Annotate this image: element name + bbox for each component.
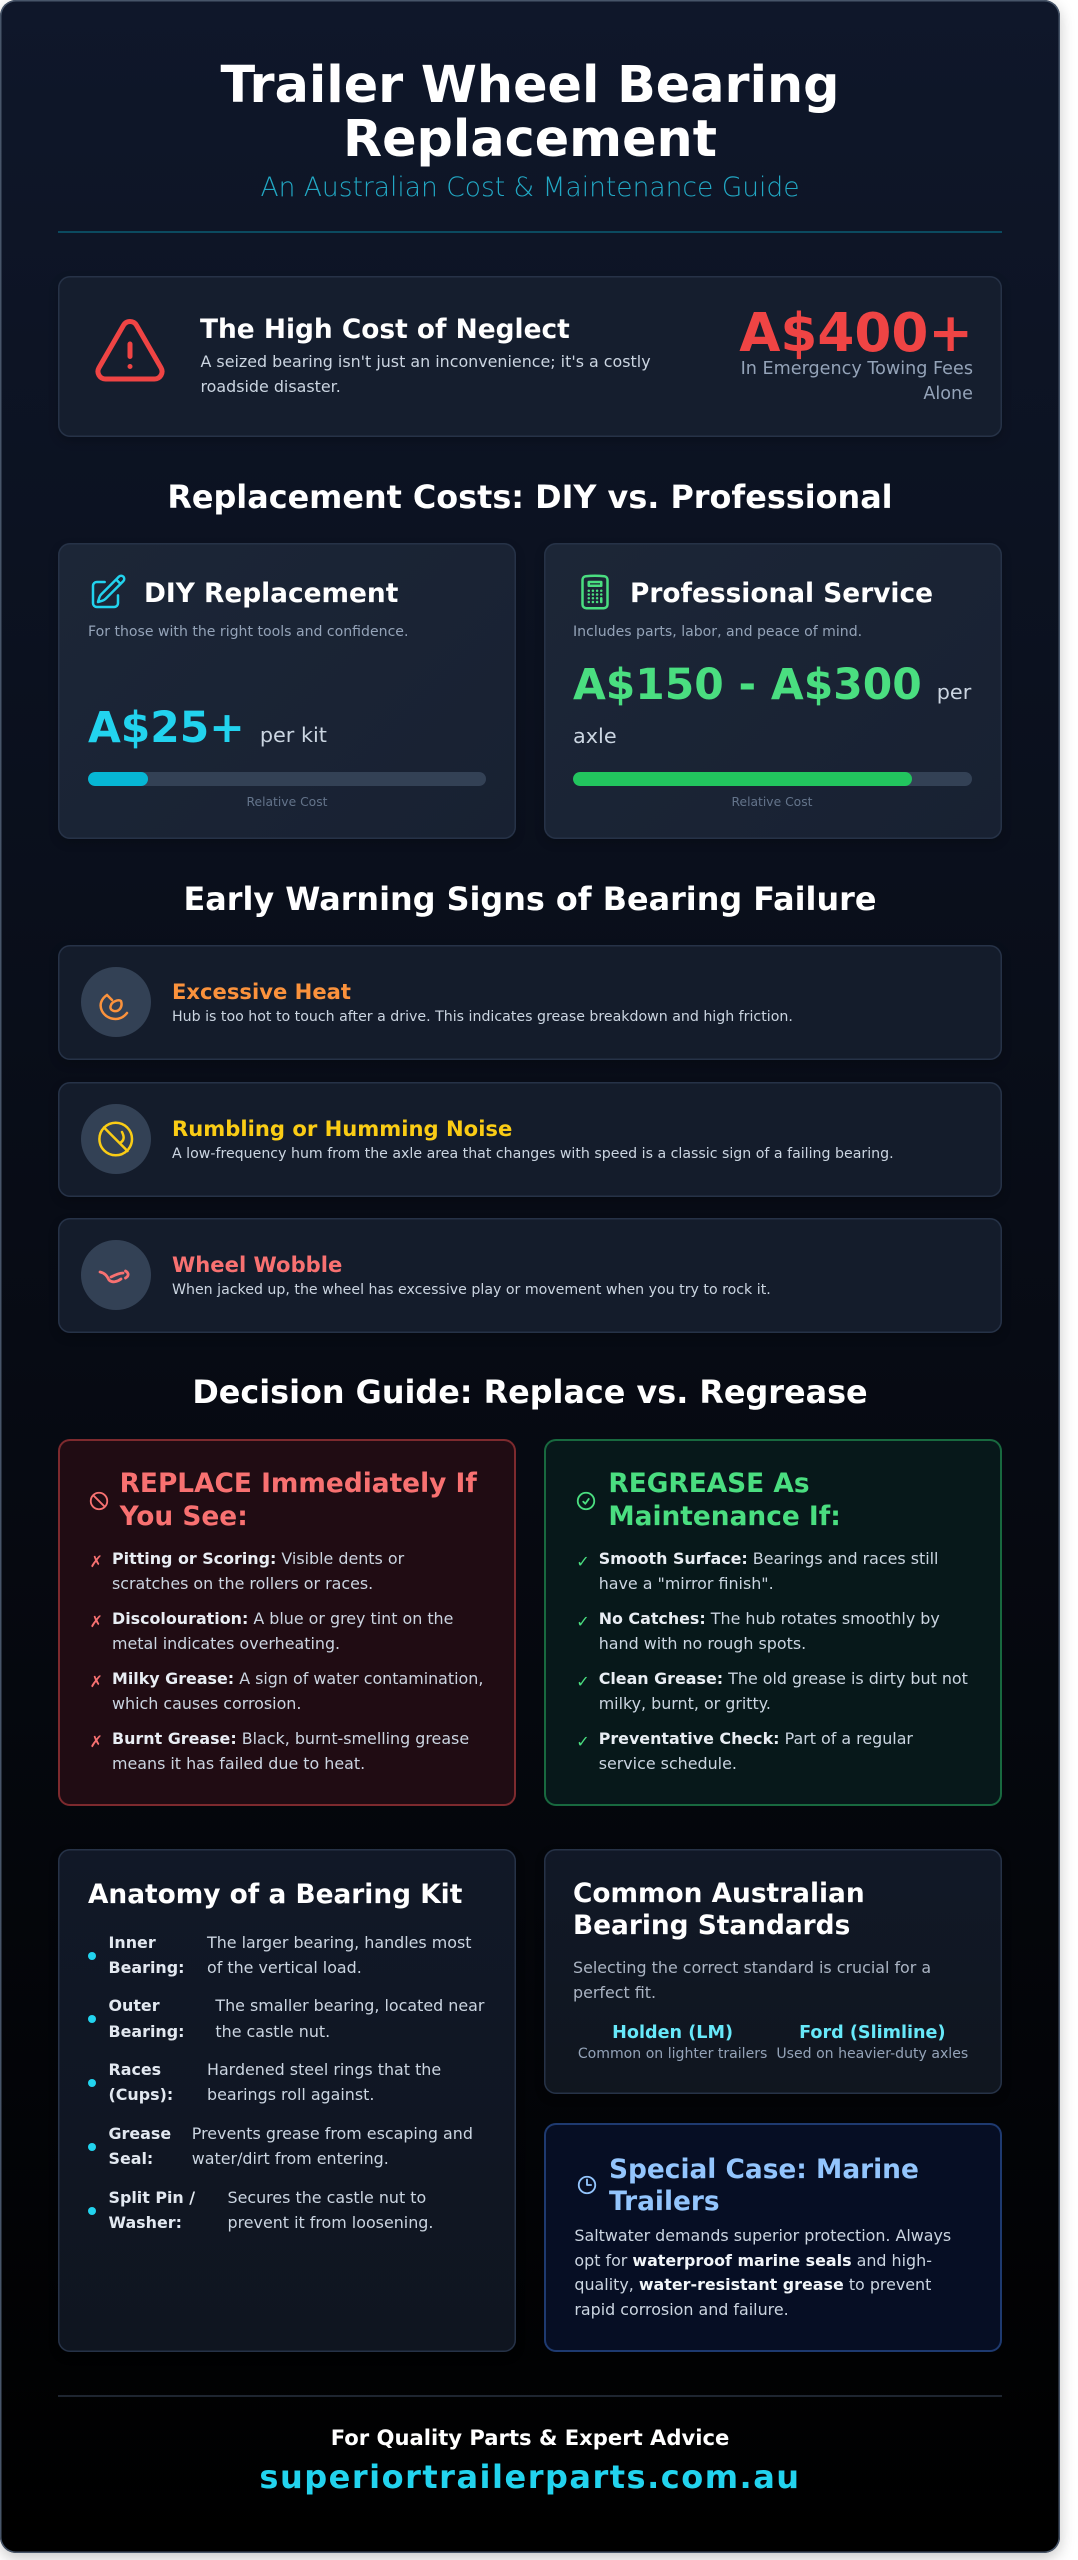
text: marine advice <box>574 2226 951 2318</box>
item: inner bearing: Inner <box>108 1933 156 1952</box>
heading: decision guide: Decision Guide: Replace vs. Regrease <box>192 1373 868 1411</box>
panel: replace: ✗ <box>90 1552 103 1571</box>
item: races: bearings roll against. <box>207 2085 374 2104</box>
panel: regrease: ✓ <box>576 1732 590 1750</box>
panel: rumbling noise <box>58 1082 1002 1197</box>
heading: DIY: DIY Replacement <box>144 578 398 609</box>
icon: no symbol <box>90 1492 108 1510</box>
standard: Ford: Ford (Slimline) <box>799 2022 946 2042</box>
item: pitting <box>90 1549 404 1593</box>
item: races <box>88 2060 441 2104</box>
item: burnt grease <box>90 1728 469 1772</box>
item: outer bearing <box>88 1996 484 2041</box>
item: inner bearing: of the vertical load. <box>207 1958 362 1977</box>
item: preventative check: service schedule. <box>599 1754 737 1772</box>
description: rumbling noise: A low-frequency hum from the axle area that changes with speed is a classic sign of a failing bearing. <box>172 1146 894 1162</box>
heading: standards <box>573 1878 865 1941</box>
icon: check circle <box>576 1492 596 1510</box>
standard: Holden: Holden (LM) <box>612 2022 733 2042</box>
text: standards intro: perfect fit. <box>573 1983 656 2002</box>
panel: anatomy of a bearing kit <box>58 1849 516 2352</box>
standard: Ford: Used on heavier-duty axles <box>776 2046 968 2062</box>
item: milky grease: Milky Grease: A sign of water contamination, <box>112 1669 483 1688</box>
text: neglect description <box>200 352 651 396</box>
heading: regrease <box>608 1468 841 1532</box>
item: clean grease: milky, burnt, or gritty. <box>599 1694 771 1713</box>
panel: regrease: ✓ <box>576 1672 590 1691</box>
panel: the high cost of neglect <box>58 276 1002 437</box>
item: races: Hardened steel rings that the <box>207 2060 441 2079</box>
icon: calculator <box>581 574 609 610</box>
heading: replace <box>119 1468 478 1532</box>
icon: wobble <box>81 1240 151 1310</box>
heading: professional: Professional Service <box>630 578 933 609</box>
panel: professional service <box>544 543 1002 839</box>
item: races: Races <box>108 2060 161 2079</box>
item: milky grease: which causes corrosion. <box>112 1694 301 1713</box>
price: professional: A$150 - A$300 per <box>573 660 971 709</box>
standard: Holden: Common on lighter trailers <box>578 2046 767 2062</box>
item: milky grease <box>90 1669 483 1713</box>
title <box>220 55 840 168</box>
footer divider <box>58 2395 1002 2396</box>
panel: bearing standards <box>544 1849 1002 2094</box>
item: inner bearing <box>88 1933 472 1977</box>
description: excessive heat: Hub is too hot to touch after a drive. This indicates grease breakdown and high friction. <box>172 1009 793 1025</box>
item: inner bearing: The larger bearing, handles most <box>207 1933 471 1952</box>
item: grease seal: Seal: <box>108 2149 153 2168</box>
icon: pencil square <box>92 574 126 608</box>
item: grease seal: water/dirt from entering. <box>192 2149 389 2168</box>
icon: flame <box>81 967 151 1037</box>
item: pitting: scratches on the rollers or races. <box>112 1574 373 1593</box>
panel: regrease: ✓ <box>576 1612 590 1631</box>
text: marine advice: rapid corrosion and failure. <box>574 2300 789 2318</box>
item: split pin: prevent it from loosening. <box>228 2213 433 2232</box>
footer website: superiortrailerparts.com.au <box>259 2458 801 2496</box>
bar: professional relative cost <box>573 772 972 786</box>
heading: neglect: The High Cost of Neglect <box>200 314 570 345</box>
heading: replacement costs: Replacement Costs: DIY vs. Professional <box>167 478 893 516</box>
price: professional <box>573 660 972 748</box>
header divider <box>58 231 1002 233</box>
item: outer bearing: The smaller bearing, located near <box>215 1996 484 2015</box>
standard: Holden <box>578 2022 767 2062</box>
heading: standards: Common Australian <box>573 1878 865 1909</box>
panel: marine trailers <box>544 2123 1002 2352</box>
item: discolouration: metal indicates overheating. <box>112 1634 340 1653</box>
title: rumbling noise: Rumbling or Humming Noise <box>172 1116 512 1141</box>
text: DIY note: For those with the right tools and confidence. <box>88 624 408 640</box>
heading: replace: You See: <box>120 1501 248 1532</box>
heading: regrease: Maintenance If: <box>608 1501 841 1532</box>
item: outer bearing: Outer <box>108 1996 160 2015</box>
price: professional: axle <box>573 724 617 748</box>
title: wheel wobble: Wheel Wobble <box>172 1252 342 1277</box>
price: DIY: A$25+ per kit <box>88 703 327 752</box>
panel: excessive heat <box>58 945 1002 1060</box>
heading: standards: Bearing Standards <box>573 1910 850 1941</box>
item: discolouration: Discolouration: A blue or grey tint on the <box>112 1609 453 1628</box>
text: standards intro <box>573 1958 931 2002</box>
panel: replace <box>58 1439 516 1806</box>
heading: replace: REPLACE Immediately If <box>120 1468 477 1499</box>
item: no catches: No Catches: The hub rotates smoothly by <box>599 1609 940 1628</box>
title: Trailer Wheel Bearing <box>220 55 840 114</box>
item: smooth surface <box>576 1549 938 1593</box>
item: burnt grease: means it has failed due to heat. <box>112 1754 365 1772</box>
panel: regrease <box>544 1439 1002 1806</box>
text: standards intro: Selecting the correct standard is crucial for a <box>573 1958 931 1977</box>
item: clean grease: Clean Grease: The old grease is dirty but not <box>599 1669 968 1688</box>
standard: Ford <box>776 2022 968 2062</box>
heading: anatomy: Anatomy of a Bearing Kit <box>88 1879 462 1910</box>
item: burnt grease: Burnt Grease: Black, burnt-smelling grease <box>112 1728 469 1748</box>
item: split pin: Secures the castle nut to <box>228 2188 426 2207</box>
item: clean grease <box>576 1669 968 1713</box>
item: races: (Cups): <box>108 2085 173 2104</box>
bar: DIY relative cost <box>88 772 486 786</box>
icon: no sound <box>81 1104 151 1174</box>
heading: marine: Special Case: Marine <box>609 2154 919 2184</box>
stat caption: Alone <box>923 384 973 404</box>
title: Replacement <box>343 109 717 168</box>
title: excessive heat: Excessive Heat <box>172 979 351 1004</box>
item: discolouration <box>90 1609 453 1653</box>
heading: marine: Trailers <box>609 2186 720 2217</box>
text: neglect description: A seized bearing isn't just an inconvenience; it's a costly <box>200 352 651 371</box>
text: professional note: Includes parts, labor, and peace of mind. <box>573 624 862 640</box>
icon: clock <box>578 2176 596 2194</box>
panel: replace: ✗ <box>90 1672 103 1691</box>
item: grease seal: Grease <box>108 2124 171 2143</box>
item: smooth surface: have a "mirror finish". <box>599 1574 774 1593</box>
item: outer bearing: the castle nut. <box>215 2022 330 2041</box>
text: neglect description: roadside disaster. <box>200 377 341 396</box>
stat caption <box>741 359 973 404</box>
item: grease seal: Prevents grease from escaping and <box>192 2124 473 2143</box>
footer tagline: For Quality Parts & Expert Advice <box>331 2425 729 2450</box>
bar caption: Relative Cost <box>732 795 812 809</box>
heading: marine <box>609 2154 919 2217</box>
panel: replace: ✗ <box>90 1612 103 1631</box>
panel: DIY replacement <box>58 543 516 839</box>
subtitle: An Australian Cost & Maintenance Guide <box>260 172 800 203</box>
heading: warning signs: Early Warning Signs of Bearing Failure <box>184 880 876 918</box>
panel: wheel wobble <box>58 1218 1002 1333</box>
icon: warning triangle <box>95 319 165 382</box>
item: no catches <box>576 1609 940 1653</box>
item: preventative check <box>576 1728 913 1772</box>
bar caption: Relative Cost <box>247 795 327 809</box>
description: wheel wobble: When jacked up, the wheel has excessive play or movement when you try to rock it. <box>172 1282 771 1298</box>
item: split pin <box>88 2188 433 2232</box>
item: grease seal <box>88 2124 473 2168</box>
panel: regrease: ✓ <box>576 1552 590 1571</box>
text: marine advice: quality, water-resistant grease to prevent <box>574 2275 931 2294</box>
item: pitting: Pitting or Scoring: Visible dents or <box>112 1549 404 1568</box>
item: preventative check: Preventative Check: Part of a regular <box>599 1728 913 1748</box>
item: split pin: Split Pin / <box>108 2188 195 2207</box>
item: outer bearing: Bearing: <box>108 2022 184 2041</box>
item: split pin: Washer: <box>108 2213 182 2232</box>
heading: regrease: REGREASE As <box>608 1468 810 1499</box>
item: inner bearing: Bearing: <box>108 1958 184 1977</box>
item: no catches: hand with no rough spots. <box>599 1634 806 1653</box>
text: marine advice: opt for waterproof marine seals and high- <box>574 2250 932 2270</box>
stat caption: In Emergency Towing Fees <box>741 359 973 379</box>
stat: towing cost: A$400+ <box>739 302 973 364</box>
item: smooth surface: Smooth Surface: Bearings and races still <box>599 1549 938 1568</box>
panel: replace: ✗ <box>90 1732 103 1750</box>
text: marine advice: Saltwater demands superior protection. Always <box>574 2226 951 2245</box>
